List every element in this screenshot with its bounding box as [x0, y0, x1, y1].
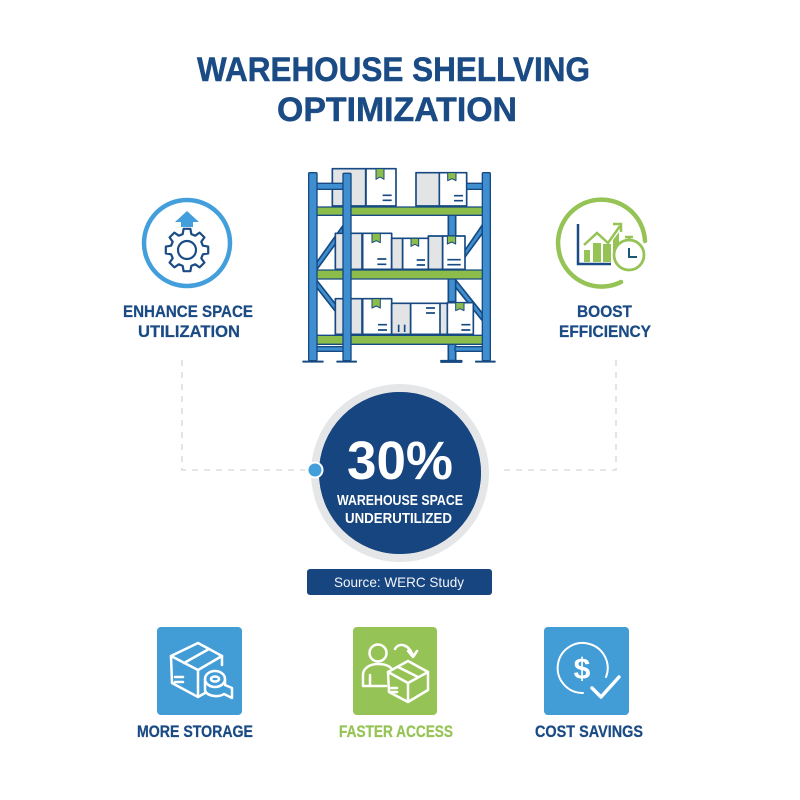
- label: faster access: FASTER ACCESS: [339, 723, 453, 741]
- title: OPTIMIZATION: [277, 91, 517, 129]
- icon: gear with upward arrow: [144, 200, 230, 286]
- label: cost savings: COST SAVINGS: [535, 723, 643, 741]
- central stat circle: [308, 388, 485, 558]
- green shelf beams: [317, 207, 483, 344]
- label: boost efficiency: BOOST: [577, 303, 632, 321]
- icon: growth chart with stopwatch: [558, 200, 645, 287]
- icon: more storage: [157, 627, 242, 715]
- connector dot: [308, 462, 322, 478]
- stat description: UNDERUTILIZED: [345, 510, 452, 527]
- label: more storage: MORE STORAGE: [137, 723, 253, 741]
- middle shelf boxes: [335, 233, 465, 269]
- stat value: 30%: [347, 431, 453, 491]
- dashed connectors: [182, 360, 616, 470]
- bottom shelf boxes: [335, 299, 473, 334]
- label: enhance space utilization: ENHANCE SPACE: [123, 303, 253, 321]
- icon: cost savings: [544, 627, 629, 715]
- warehouse shelving rack illustration: [302, 169, 496, 363]
- source badge: [307, 569, 492, 595]
- source badge: Source: WERC Study: [334, 574, 464, 590]
- rack feet: [302, 361, 496, 363]
- stat description: [337, 492, 463, 527]
- stat description: WAREHOUSE SPACE: [337, 492, 463, 509]
- icon: cost savings: $: [574, 653, 591, 686]
- rack diagonal braces: [316, 225, 482, 321]
- top shelf boxes: [332, 169, 467, 206]
- title: WAREHOUSE SHELLVING: [197, 51, 590, 89]
- rack horizontal top and bottom rails: [315, 183, 483, 351]
- rack inner right post: [441, 213, 462, 362]
- label: boost efficiency: EFFICIENCY: [559, 323, 651, 341]
- label: enhance space utilization: UTILIZATION: [138, 323, 240, 341]
- icon: faster access: [353, 627, 437, 715]
- title: [197, 51, 590, 129]
- label: enhance space utilization: [123, 303, 253, 341]
- label: boost efficiency: [559, 303, 651, 341]
- rack upright posts: [309, 173, 490, 361]
